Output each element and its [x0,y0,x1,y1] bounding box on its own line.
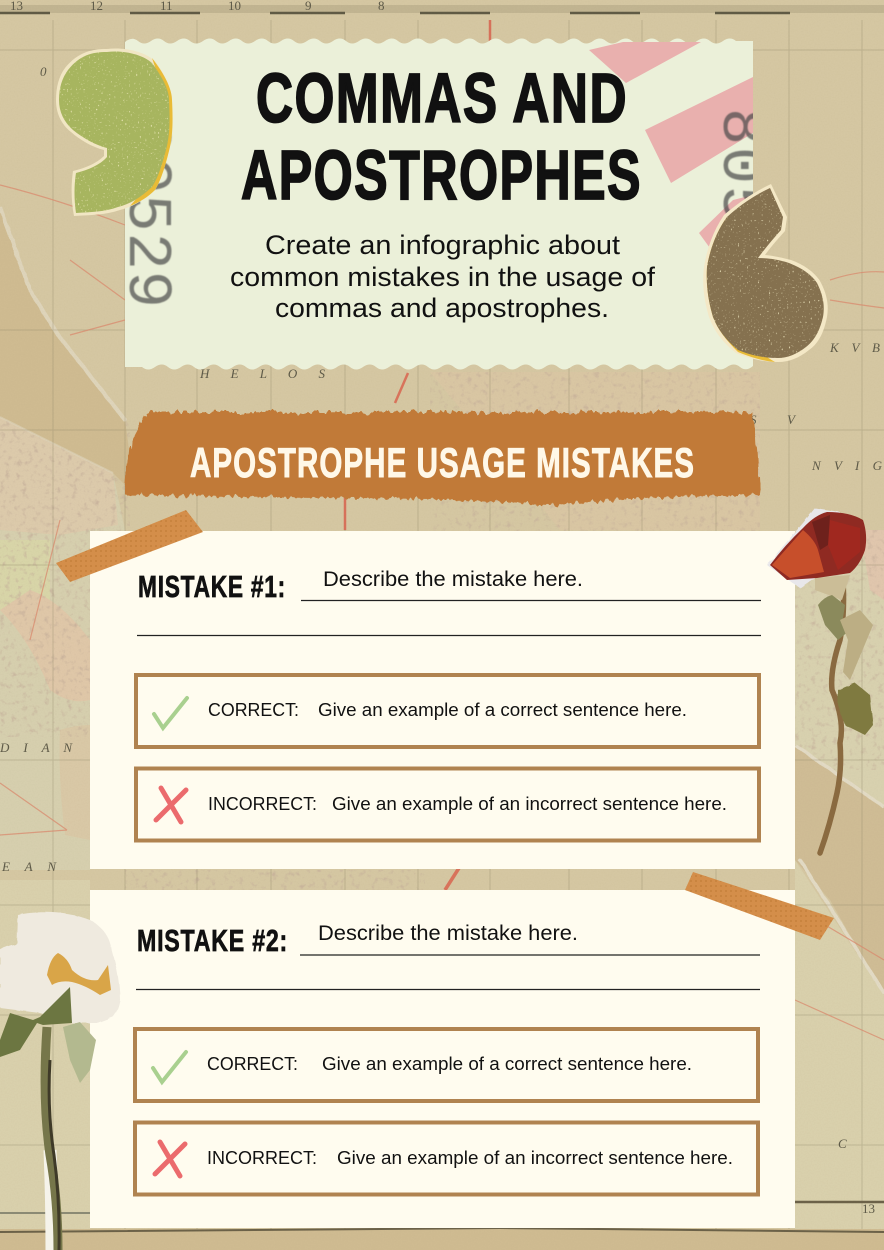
incorrect text: INCORRECT: [208,793,317,814]
mistake 2 description: Describe the mistake here. [318,922,578,945]
mistake 1 description: Describe the mistake here. [323,568,583,591]
icon: cross [156,788,186,822]
stamped numbers: 80529 [111,118,182,308]
washi tape right [685,872,834,940]
dried white flower [0,912,120,1250]
map labels: N V I G [811,458,883,473]
incorrect text: INCORRECT: [207,1147,317,1168]
icon: brown opening quote [703,184,830,365]
flower petals [0,912,120,1023]
rose head [770,512,866,580]
incorrect text: Give an example of an incorrect sentence here. [332,793,727,814]
incorrect box [135,1122,758,1194]
title [241,59,642,214]
correct text: CORRECT: [207,1053,298,1074]
map labels: E A N [1,859,57,874]
mistake 1 heading: MISTAKE #1: [138,569,286,604]
stamped numbers: 805 [705,108,776,223]
mistake 2 heading: MISTAKE #2: [137,923,288,958]
correct text: CORRECT: [208,699,299,720]
rose leaves [815,575,873,735]
pink tape pieces [589,36,753,255]
map labels: H E L O S [199,366,326,381]
dried red rose [767,508,873,853]
incorrect box [136,768,759,840]
icon: green comma [55,45,175,220]
panel: mistake 1 [90,531,795,869]
map labels: C [838,1136,847,1151]
correct text: Give an example of a correct sentence here. [322,1053,692,1074]
map labels: D I A N [0,740,73,755]
subtitle: Create an infographic about [265,230,621,260]
icon: cross [155,1142,185,1176]
washi tape top left [56,510,203,582]
rose stem [820,580,844,853]
subtitle [230,230,656,323]
subtitle: commas and apostrophes. [275,293,609,323]
stamped numbers [111,108,776,308]
icon: check [154,698,187,728]
map labels: 13 [862,1201,875,1216]
correct text: Give an example of a correct sentence here. [318,699,687,720]
subtitle: common mistakes in the usage of [230,262,656,292]
incorrect text: Give an example of an incorrect sentence here. [337,1147,733,1168]
section banner [125,412,760,505]
correct box [136,675,759,747]
title: COMMAS AND [256,59,628,137]
map labels: S V [750,412,797,427]
rose backing [767,508,840,588]
flower leaves [0,987,72,1057]
map labels: 0 [40,64,47,79]
map labels: K V B [829,340,880,355]
torn paper title panel [111,36,776,370]
title: APOSTROPHES [241,136,642,214]
icon: check [153,1052,186,1082]
panel: mistake 2 [90,890,795,1228]
correct box [135,1029,758,1101]
flower stem [50,1150,52,1250]
flower dye [47,953,111,995]
